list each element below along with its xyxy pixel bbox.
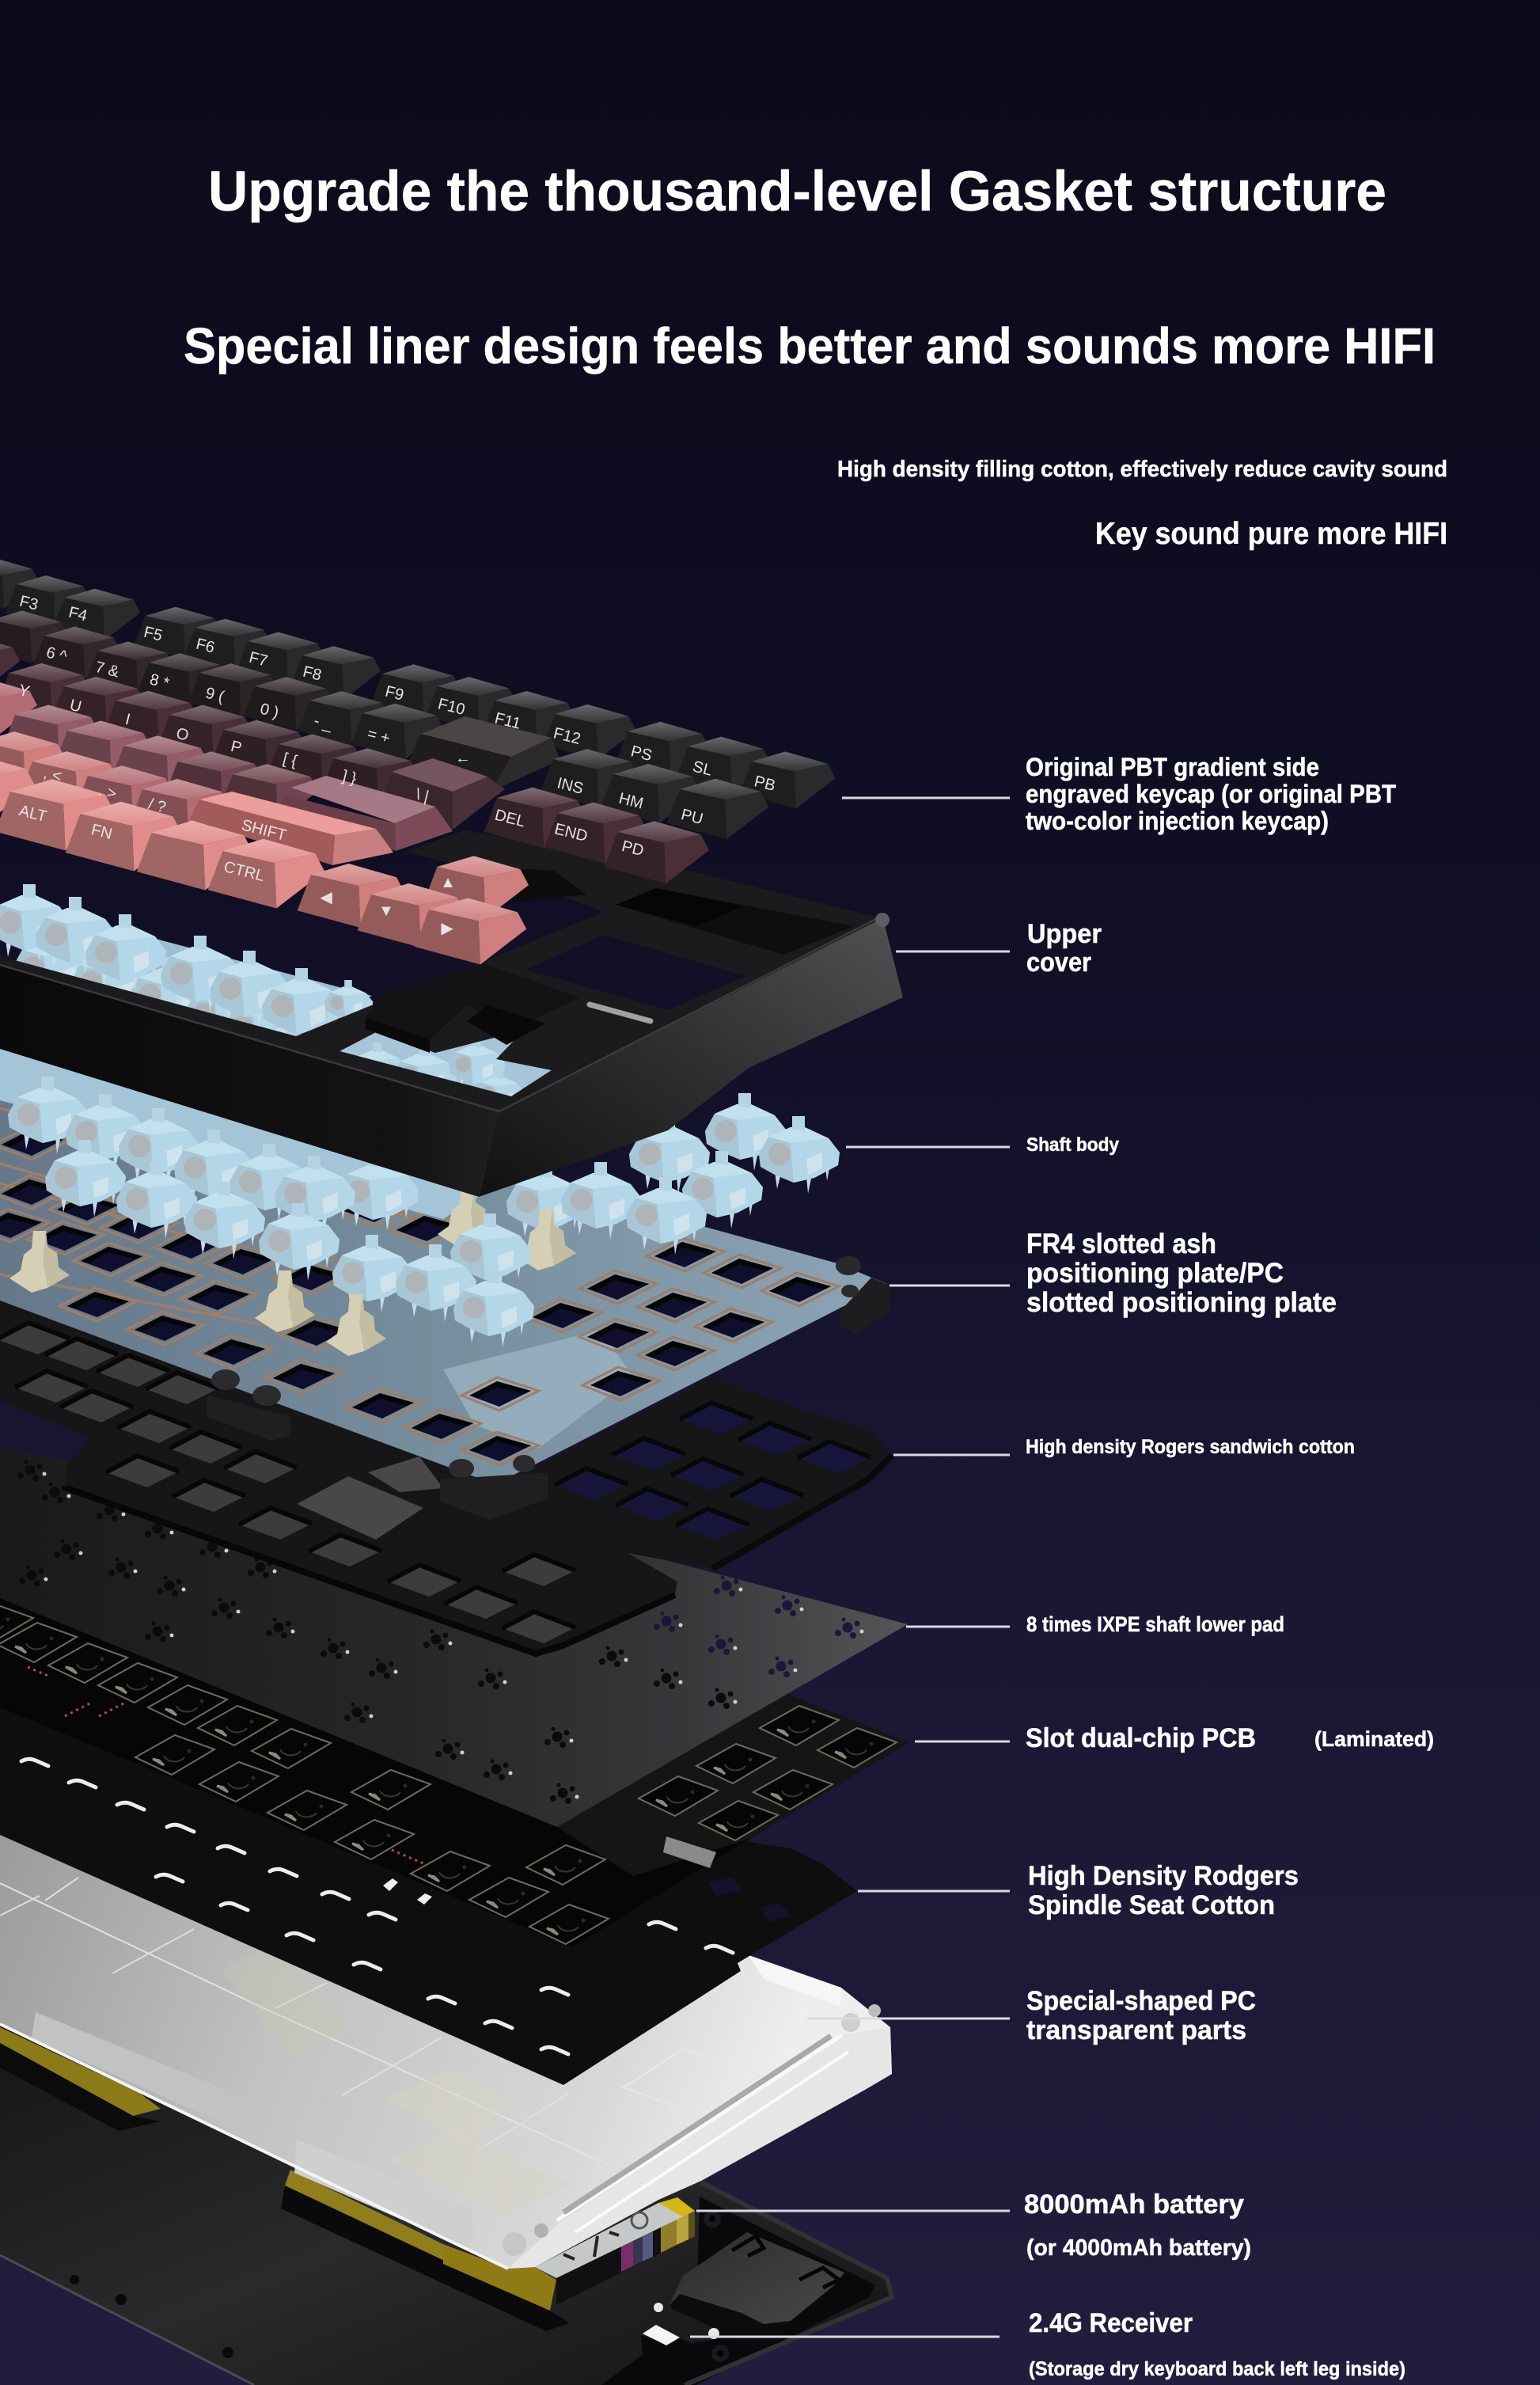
title: Upgrade the thousand-level Gasket structure [208,161,1386,223]
function row [0,558,836,809]
key legends [17,593,777,937]
label: keycap: engraved keycap (or original PBT [1026,780,1396,808]
key legends: F10 [436,695,467,719]
transparent PC case [0,1835,892,2269]
label: keycap: two-color injection keycap) [1026,807,1329,835]
key legends: , < [42,765,63,786]
key legends: F6 [194,636,216,657]
switches under cover: shaft body [0,1049,840,1281]
label: upper cover: Upper [1027,919,1102,949]
label: PC transparent parts: Special-shaped PC [1026,1986,1256,2016]
key legends: F8 [301,663,323,685]
label: battery: 8000mAh battery [1024,2189,1244,2220]
QWERTY row [0,636,709,883]
key legends: Y [17,682,32,701]
key legends: 6 ^ [44,644,69,666]
cover raised block [366,1017,430,1053]
key legends: F9 [383,683,405,704]
key legends: [ { [281,750,299,770]
key legends: PU [679,806,705,828]
battery [0,2027,695,2331]
key legends: PB [753,773,777,795]
label: Rogers cotton: High density Rogers sandwich cotton [1026,1436,1355,1458]
label: laminated: (Laminated) [1314,1727,1434,1751]
key legends: F5 [142,624,164,645]
key legends: SHIFT [240,817,288,845]
cover top surface [0,830,882,1111]
modifier row [0,755,324,909]
FR4 positioning plate [0,1032,890,1520]
label: FR4 plate [1026,1229,1337,1318]
key legends: \ | [414,786,431,806]
label: upper cover: cover [1026,948,1091,978]
switches visible through upper cover [0,884,552,1117]
key legends: PS [629,742,654,765]
cover slot highlight [590,1005,651,1021]
spindle seat cotton [0,1686,857,2085]
key legends: CTRL [222,858,266,885]
key legends: ▲ [440,874,456,891]
key legends: P [229,738,244,757]
key legends: ← [455,750,471,767]
label: battery [1024,2189,1251,2261]
key legends: ALT [17,802,48,826]
key legends: HM [617,790,645,813]
upper cover [0,830,903,1197]
key sockets [0,1604,897,1944]
key legends: INS [556,774,585,798]
PCB [0,1595,908,1947]
key legends: / ? [146,796,168,817]
key legends: - _ [312,712,335,734]
plate holes [0,1126,839,1465]
pad holes [17,1460,864,1804]
label: keycap [1026,753,1396,835]
label: spindle seat cotton [1028,1861,1299,1920]
receiver bracket [641,2232,844,2363]
key legends: I [123,711,132,729]
subtitle: Special liner design feels better and sounds more HIFI [184,317,1436,374]
key legends: . > [97,782,118,803]
gasket feet [207,1256,890,1520]
Rogers sandwich cotton [0,1282,892,1654]
key legends: 7 & [93,659,121,682]
key legends: U [68,697,83,716]
key legends: F12 [552,724,582,748]
keycaps [0,558,836,964]
label: receiver [1029,2308,1405,2380]
label: spindle seat cotton: High Density Rodgers [1028,1861,1299,1891]
bottom case [0,2026,892,2385]
number row [0,611,768,839]
cover right face [479,916,903,1197]
key legends: FN [89,821,114,843]
cover front face [0,965,499,1197]
key legends: END [552,820,590,845]
key legends: F4 [66,604,89,625]
key legends: F3 [17,593,40,614]
key legends: PD [620,837,646,860]
key legends: O [174,725,191,745]
key legends: ] } [340,767,358,788]
label: battery: (or 4000mAh battery) [1026,2235,1251,2261]
label: spindle seat cotton: Spindle Seat Cotton [1028,1890,1275,1920]
key legends: SL [691,758,714,780]
key legends: = + [366,725,392,747]
label: PC transparent parts: transparent parts [1026,2015,1246,2045]
stabilizers [9,1187,576,1356]
label: IXPE pad: 8 times IXPE shaft lower pad [1026,1612,1284,1636]
label: receiver: 2.4G Receiver [1029,2308,1193,2338]
key legends: F7 [247,649,269,670]
label: PC transparent parts [1026,1986,1256,2045]
label: FR4 plate: slotted positioning plate [1026,1287,1337,1318]
leader lines [690,798,1010,2337]
key legends: ◀ [320,889,332,906]
note: key sound: Key sound pure more HIFI [1095,517,1447,551]
home row [0,679,453,851]
label: PCB: Slot dual-chip PCB [1026,1723,1256,1753]
key legends: DEL [493,807,527,831]
label: keycap: Original PBT gradient side [1026,753,1319,781]
label: upper cover [1026,919,1102,978]
label: shaft body: Shaft body [1026,1134,1120,1156]
bottom letter row [0,731,393,865]
note: filling cotton: High density filling cotton, effectively reduce cavity sound [837,457,1447,482]
cotton holes [0,1323,871,1643]
label: receiver: (Storage dry keyboard back left leg inside) [1029,2358,1405,2380]
key legends: F11 [493,710,522,733]
key legends: 0 ) [258,701,280,722]
key legends: ▼ [378,902,394,920]
label: FR4 plate: positioning plate/PC [1026,1258,1284,1289]
arrow keys [298,856,529,964]
white slot ticks [21,1759,733,2054]
label: FR4 plate: FR4 slotted ash [1026,1229,1216,1259]
key legends: 9 ( [203,685,226,706]
key legends: 8 * [148,671,171,693]
IXPE pad [0,1449,908,1827]
key legends: ▶ [441,920,453,937]
